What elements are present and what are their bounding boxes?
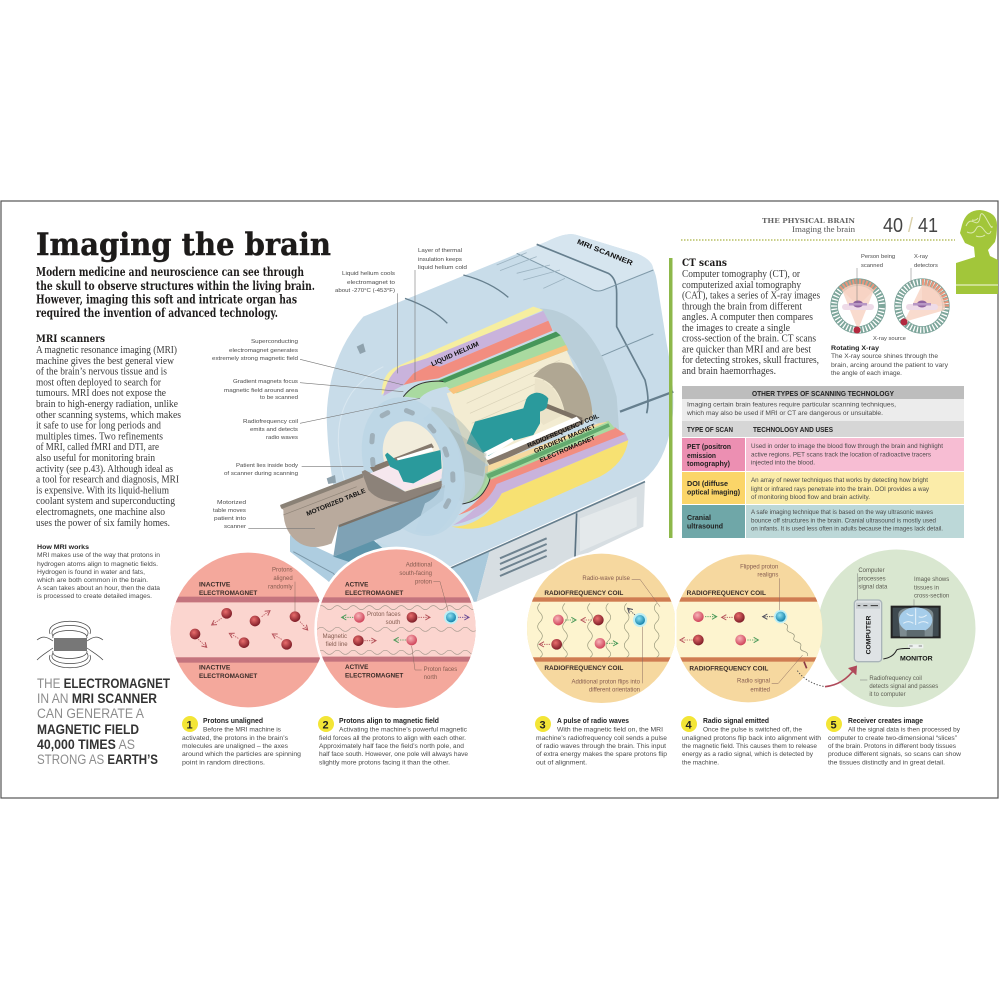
circle 1: protons unaligned: ELECTROMAGNET	[199, 673, 257, 680]
leader lines	[248, 270, 420, 528]
circle 3: a pulse of radio waves: different orientation	[589, 688, 640, 694]
intro text: Modern medicine and neuroscience can see through	[36, 265, 304, 279]
step 2 caption: half face south. However, one pole will always have	[319, 751, 469, 758]
scanner annotations: of scanner during scanning	[224, 471, 298, 477]
MRI scanners body text: also useful for monitoring brain	[36, 453, 155, 464]
CT scans body text: Computer tomography (CT), or	[682, 269, 801, 280]
scanner annotations: Radiofrequency coil	[243, 419, 298, 425]
How MRI works text	[36, 544, 161, 600]
layer: upper insulation	[382, 307, 543, 395]
CT scans body text	[682, 269, 820, 377]
CT diagram labels: Person being	[861, 254, 895, 260]
step 1 caption	[182, 716, 302, 766]
circle 2: protons align: Magnetic	[323, 634, 347, 640]
ring bolts	[369, 407, 456, 510]
How MRI works text: How MRI works	[37, 544, 89, 551]
table: other types of scanning technology: TYPE OF SCAN	[687, 427, 733, 434]
tunnel opening	[372, 412, 453, 504]
CT diagram labels: X-ray source	[873, 336, 906, 342]
intro text: the skull to observe structures within the living brain.	[36, 279, 315, 293]
row: PET: tomography)	[687, 461, 730, 468]
step 5 caption: produce different signals, so scans can show	[828, 751, 961, 758]
table intro	[682, 399, 964, 421]
MRI scanners body text: other scanning systems, which makes	[36, 410, 181, 421]
label: MRI scanner: MRI SCANNER	[576, 239, 634, 267]
layer: upper electromagnet	[403, 321, 553, 385]
circle 3: a pulse of radio waves: Radio-wave pulse	[582, 576, 631, 582]
circle 1: protons unaligned: INACTIVE	[199, 665, 231, 672]
circle 1: protons unaligned: Protons	[272, 568, 293, 574]
step 3 caption: machine’s radiofrequency coil sends a pulse	[536, 735, 668, 742]
callout: electromagnet fact: MAGNETIC FIELD	[37, 722, 139, 737]
step 4 caption: unaligned protons flip back into alignment with	[682, 735, 822, 742]
MRI scanners body text: is expensive. With its liquid-helium	[36, 485, 169, 496]
step 3 caption: With the magnetic field on, the MRI	[557, 726, 663, 734]
MRI scanners body text	[36, 345, 181, 529]
rotating X-ray caption: Rotating X-ray	[831, 345, 879, 352]
step 5 caption: All the signal data is then processed by	[848, 726, 961, 734]
motorized table	[280, 473, 445, 557]
CT scans body text: the images to create a single	[682, 323, 791, 334]
row: PET: PET (positron	[687, 444, 731, 451]
callout: electromagnet fact: THE ELECTROMAGNET	[37, 676, 171, 691]
scanner annotations: liquid helium cold	[418, 265, 467, 271]
step 4 caption	[681, 716, 822, 766]
title: Imaging the brain	[36, 227, 331, 263]
step 5 caption: computer to create two-dimensional “slices”	[828, 735, 957, 742]
circle 2: protons align: south	[386, 620, 400, 626]
scanner annotations: Patient lies inside body	[236, 463, 298, 469]
row: DOI: of monitoring blood flow and brain activity.	[751, 495, 870, 501]
labels: circle 5: tissues in	[914, 585, 939, 591]
row: PET: Used in order to image the blood flow through the brain and highlight	[751, 444, 943, 450]
patient legs	[385, 450, 442, 483]
CT scans heading: CT scans	[682, 258, 727, 269]
CT scans body text: (CAT), takes a series of X-ray images	[682, 290, 820, 302]
step 5 caption: 5	[830, 720, 837, 732]
circle 5: receiver creates image	[817, 548, 977, 708]
step 4 caption: the machine.	[682, 760, 719, 766]
row: cranial ultrasound: A safe imaging technique that is based on the way ultrasonic waves	[751, 510, 933, 516]
row: DOI: An array of newer techniques that works by detecting how bright	[751, 478, 928, 484]
step 2 caption: Activating the machine’s powerful magnetic	[339, 726, 467, 734]
row: DOI: optical imaging)	[687, 490, 740, 496]
CT diagram labels: detectors	[914, 263, 938, 269]
labels: circle 5: signal data	[858, 585, 888, 591]
row: cranial ultrasound: ultrasound	[687, 524, 723, 530]
scanner annotations	[212, 248, 467, 530]
row: cranial ultrasound: on infants. It is used less often in adults because the images lack detail.	[751, 526, 943, 532]
divider: CT column	[669, 258, 672, 538]
step 4 caption: energy as a radio signal, which is detected by	[682, 751, 814, 758]
labels: circle 5	[858, 568, 949, 698]
table: other types of scanning technology: OTHER TYPES OF SCANNING TECHNOLOGY	[752, 389, 894, 398]
How MRI works text: MRI makes use of the way that protons in	[37, 552, 161, 559]
labels: circle 5: Computer	[858, 568, 885, 574]
How MRI works text: hydrogen atoms align to magnetic fields.	[37, 561, 158, 568]
scanner annotations: Layer of thermal	[418, 248, 462, 254]
circle 2: protons align: Proton faces	[367, 612, 401, 618]
scanner annotations: Liquid helium cools	[342, 271, 395, 277]
circle 4: radio signal emitted: RADIOFREQUENCY COIL	[689, 666, 768, 673]
MRI scanners body text: it safe to use for long periods and	[36, 421, 161, 432]
layer: upper liquid helium	[383, 311, 548, 396]
intro text	[36, 265, 315, 320]
MRI process circles 1 and 2	[167, 547, 478, 711]
step 5 caption	[826, 716, 961, 766]
MRI scanners body text: brain to high-energy radiation, unlike	[36, 399, 179, 410]
page frame	[1, 201, 998, 798]
How MRI works text: which are both common in the brain.	[36, 577, 148, 584]
labels: circle 5: Image shows	[914, 577, 949, 583]
step 3 caption: A pulse of radio waves	[557, 718, 629, 725]
CT scans body text: for detecting strokes, skull fractures,	[682, 355, 819, 366]
step 4 caption: Once the pulse is switched off, the	[703, 726, 803, 734]
step 5 caption: the tissues distinctly and in great detail.	[828, 760, 945, 766]
MRI scanners body text: of MRI, called fMRI and DTI, are	[36, 442, 160, 453]
CT scanner diagram 2	[895, 268, 949, 333]
circle 2: protons align	[314, 547, 478, 711]
step 1 caption: activated, the protons in the brain’s	[182, 735, 288, 742]
step 2 caption: field forces all the protons to align with each other.	[319, 735, 466, 742]
circle 2: protons align: ACTIVE	[345, 582, 369, 589]
scanner annotations: emits and detects	[250, 427, 298, 433]
table header row	[682, 421, 964, 437]
row: PET	[682, 438, 964, 471]
circle 2: protons align: field line	[326, 642, 348, 648]
scanner annotations: electromagnet to	[347, 280, 395, 286]
circle 2: protons align: ELECTROMAGNET	[345, 590, 403, 597]
callout: electromagnet fact	[37, 676, 171, 767]
How MRI works text: A scan takes about an hour, then the data	[37, 585, 161, 592]
rotating X-ray caption: the angle of each image.	[831, 370, 902, 377]
table: other types of scanning technology: Imaging certain brain features require particular scanning techniques,	[687, 402, 896, 408]
bed and rail inside tunnel	[483, 417, 584, 466]
CT scans body text: are quicker than MRI and are best	[682, 344, 811, 355]
labels: scanner layers: RADIOFREQUENCY COIL	[526, 413, 600, 450]
MRI scanners body text: coolant system and superconducting	[36, 496, 175, 507]
computer tower	[854, 600, 882, 662]
arrow: signal to computer	[797, 662, 857, 687]
label: motorized table: MOTORIZED TABLE	[305, 488, 367, 518]
monitor	[883, 606, 941, 663]
How MRI works text: Hydrogen is found in water and fats,	[37, 569, 145, 576]
callout: electromagnet fact: STRONG AS EARTH’S	[37, 752, 158, 767]
step 2 caption: Approximately half face the field’s north pole, and	[319, 743, 465, 750]
page numbers: 40 / 41	[883, 215, 938, 237]
circle 3: a pulse of radio waves: Additional proton flips into	[571, 679, 641, 685]
step 5 caption: Receiver creates image	[848, 718, 923, 725]
row: cranial ultrasound	[682, 505, 964, 538]
computer tower: COMPUTER	[865, 615, 872, 654]
table: other types of scanning technology	[682, 386, 964, 538]
table title	[682, 386, 964, 399]
table cradle and sheet	[362, 443, 442, 502]
step 3 caption: out of alignment.	[536, 760, 587, 766]
step 2 caption	[318, 716, 469, 766]
labels: scanner layers: ELECTROMAGNET	[539, 434, 596, 464]
CT scans body text: through the brain from different	[682, 301, 802, 312]
scanner annotations: table moves	[213, 508, 246, 514]
step 2 caption: Protons align to magnetic field	[339, 718, 439, 725]
scanner base	[290, 481, 645, 607]
row: DOI: light or infrared rays penetrate into the brain. DOI provides a way	[751, 487, 929, 493]
layer: lower bands	[452, 421, 628, 529]
scanner annotations: about -270°C (-453°F)	[335, 288, 395, 294]
front ring of scanner	[343, 383, 483, 551]
row: PET: injected into the blood.	[751, 460, 815, 466]
circle 4: radio signal emitted: RADIOFREQUENCY COIL	[687, 590, 766, 597]
icon: bar magnet with field lines	[37, 621, 103, 668]
circle 2: protons align: proton	[415, 579, 432, 585]
circle 1: protons unaligned: ELECTROMAGNET	[199, 590, 257, 597]
circle 1: protons unaligned	[170, 552, 320, 708]
circle 2: protons align: Proton faces	[424, 667, 457, 673]
step 3 caption: of radio waves through the brain. This input	[536, 743, 666, 750]
MRI scanners body text: multiples times. Two refinements	[36, 431, 163, 442]
step 2 caption: slightly more protons facing it than the other.	[319, 760, 450, 766]
rotating X-ray caption: brain, arcing around the patient to vary	[831, 362, 949, 369]
step 1 caption: point in random directions.	[182, 760, 265, 766]
table: other types of scanning technology: TECHNOLOGY AND USES	[753, 427, 833, 434]
layer: tunnel interior	[447, 350, 593, 467]
scanner annotations: Gradient magnets focus	[233, 379, 298, 385]
MRI scanners body text: electromagnets, one machine also	[36, 507, 165, 518]
How MRI works text: is processed to create detailed images.	[37, 593, 152, 600]
CT scans body text: angles. A computer then compares	[682, 312, 813, 323]
callout: electromagnet fact: IN AN MRI SCANNER	[37, 691, 157, 706]
circle 1: protons unaligned: aligned	[273, 576, 293, 582]
circle 4: radio signal emitted: emitted	[750, 687, 770, 693]
table: other types of scanning technology: which may also be used if MRI or CT are dangerous or unsuitable.	[686, 410, 883, 417]
row: cranial ultrasound: Cranial	[687, 515, 711, 522]
scanner annotations: radio waves	[266, 435, 298, 441]
rotating X-ray caption	[831, 345, 949, 377]
scanner annotations: to be scanned	[260, 395, 298, 401]
row: DOI: DOI (diffuse	[687, 481, 728, 488]
row: PET: emission	[687, 453, 716, 460]
MRI process circles 3, 4, 5	[523, 548, 977, 708]
CT scans body text: cross-section of the brain. CT scans	[682, 334, 816, 344]
labels: scanner layers: GRADIENT MAGNET	[533, 423, 597, 455]
circle 3: a pulse of radio waves: RADIOFREQUENCY COIL	[544, 590, 623, 597]
circle 4: radio signal emitted	[673, 554, 823, 702]
page header	[681, 215, 955, 240]
labels: circle 5: processes	[858, 576, 886, 582]
circle 2: protons align: north	[424, 675, 437, 681]
row: cranial ultrasound: bounce off structures in the brain. Cranial ultrasound is mostly used	[751, 518, 936, 524]
scanner annotations: electromagnet generates	[229, 348, 298, 354]
circle 4: radio signal emitted: realigns	[757, 573, 778, 579]
CT scans body text: and brain haemorrhages.	[682, 366, 776, 377]
step 5 caption: of the brain. Protons in different body tissues	[828, 743, 956, 750]
scanner annotations: Superconducting	[251, 339, 298, 345]
callout: electromagnet fact: 40,000 TIMES AS	[37, 737, 135, 752]
scanner annotations: Motorized	[217, 500, 246, 506]
CT scans body text: computerized axial tomography	[682, 280, 801, 291]
step 1 caption: Before the MRI machine is	[203, 726, 281, 734]
scanner annotations: insulation keeps	[418, 257, 462, 263]
MRI scanners body text: A magnetic resonance imaging (MRI)	[36, 345, 177, 356]
circle 3: a pulse of radio waves	[523, 552, 680, 705]
MRI scanners body text: machine gives the best general view	[36, 356, 175, 367]
scanner housing	[327, 234, 673, 567]
labels: circle 5: it to computer	[869, 692, 906, 698]
inner bore of scanner	[427, 407, 488, 503]
patient torso and head	[467, 393, 548, 456]
labels: circle 5: Radiofrequency coil	[869, 676, 922, 682]
callout: electromagnet fact: CAN GENERATE A	[37, 706, 144, 721]
step 2 caption: 2	[322, 720, 329, 732]
front ring right side	[415, 412, 464, 535]
step 3 caption: of extra energy makes the spare protons flip	[536, 751, 668, 758]
MRI scanners body text: a tool for research and diagnosis, MRI	[36, 475, 179, 486]
row: DOI	[682, 472, 964, 504]
CT scanner diagram 1	[831, 268, 885, 334]
CT diagram labels: scanned	[861, 263, 883, 269]
step 4 caption: Radio signal emitted	[703, 718, 769, 725]
intro text: required the invention of advanced technology.	[36, 306, 278, 320]
MRI scanners body text: activity (see p.43). Although ideal as	[36, 464, 173, 475]
label: liquid helium: LIQUID HELIUM	[430, 341, 480, 368]
circle 1: protons unaligned: randomly	[268, 584, 293, 590]
scanner annotations: extremely strong magnetic field	[212, 356, 298, 362]
intro text: However, imaging this soft and intricate organ has	[36, 292, 297, 306]
step 4 caption: 4	[686, 720, 692, 732]
step 3 caption: 3	[540, 720, 546, 732]
circle 2: protons align: ELECTROMAGNET	[345, 672, 403, 679]
subsection name: Imaging the brain	[792, 225, 855, 234]
step 1 caption: around which the particles are spinning	[182, 751, 302, 758]
scanner annotations: magnetic field around area	[224, 388, 299, 394]
MRI scanners body text: uses the power of six family homes.	[36, 518, 170, 529]
labels: circle 5: cross-section	[914, 593, 949, 599]
icon: green head tab	[956, 210, 998, 294]
step 3 caption	[535, 716, 668, 766]
MRI scanners section	[36, 334, 181, 529]
layer: upper gradient and radiofrequency	[403, 332, 568, 398]
rotating X-ray caption: The X-ray source shines through the	[831, 353, 938, 360]
MRI scanners body text: most often deployed to search for	[36, 377, 162, 388]
circle 2: protons align: south-facing	[399, 571, 432, 577]
CT diagram labels: X-ray	[914, 254, 928, 260]
circle 4: radio signal emitted: Radio signal	[737, 679, 770, 685]
scanner annotations: patient into	[214, 516, 246, 522]
circle 2: protons align: Additional	[406, 563, 432, 569]
MRI scanner illustration	[248, 234, 673, 607]
section name: THE PHYSICAL BRAIN	[762, 217, 855, 225]
row: PET: active regions. PET scans track the location of radioactive tracers	[751, 452, 931, 458]
step 1 caption: Protons unaligned	[203, 718, 263, 725]
circle 1: protons unaligned: INACTIVE	[199, 582, 231, 589]
MRI scanners body text: of the brain’s nervous tissue and is	[36, 367, 167, 378]
scanner annotations: scanner	[224, 524, 246, 530]
step 1 caption: 1	[186, 720, 193, 732]
CT diagram labels	[861, 254, 938, 342]
step 1 caption: molecules are unaligned – the axes	[182, 743, 288, 750]
MRI scanners body text: tumours. MRI does not expose the	[36, 388, 167, 399]
MRI scanners heading: MRI scanners	[36, 334, 105, 345]
labels: circle 5: detects signal and passes	[869, 684, 938, 690]
circle 3: a pulse of radio waves: RADIOFREQUENCY COIL	[544, 665, 623, 672]
monitor: MONITOR	[900, 656, 933, 663]
CT scans section	[682, 258, 820, 377]
circle 2: protons align: ACTIVE	[345, 664, 369, 671]
step 4 caption: the magnetic field. This causes them to release	[682, 743, 817, 750]
circle 4: radio signal emitted: Flipped proton	[740, 565, 778, 571]
